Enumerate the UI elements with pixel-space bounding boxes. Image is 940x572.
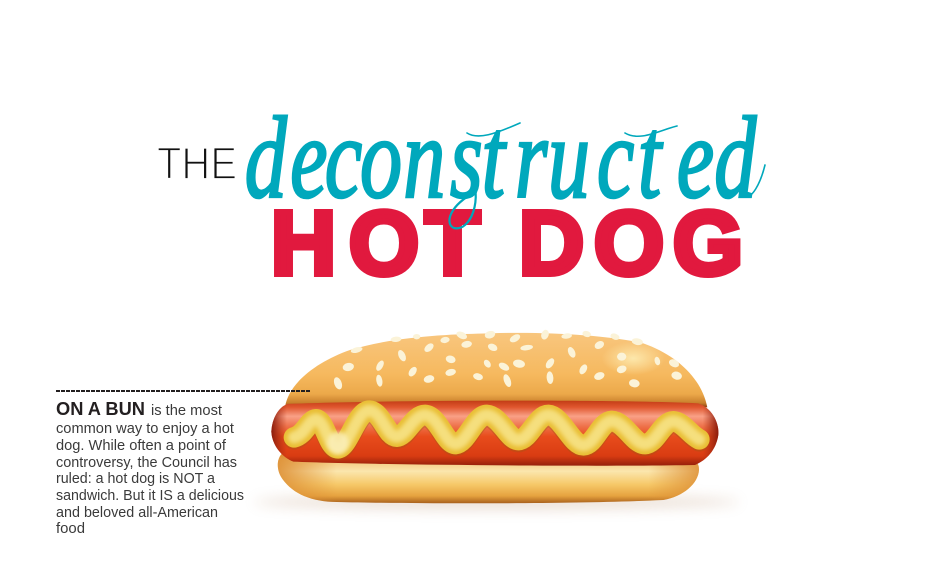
text block: on a bun: [56, 399, 244, 537]
ground shadow: [253, 495, 740, 509]
body line 8: food: [56, 520, 85, 537]
title words: HOT DOG: HOT DOG: [271, 194, 743, 294]
script flourishes: [449, 123, 765, 228]
illustration: hot dog in a bun: [253, 329, 740, 509]
body line 6: sandwich. But it IS a delicious: [56, 487, 244, 504]
title: [157, 94, 765, 294]
body line 2: common way to enjoy a hot: [56, 420, 235, 437]
body line 1: is the most: [151, 402, 223, 419]
leader line: dashed: [56, 390, 310, 392]
body line 4: controversy, the Council has: [56, 454, 237, 471]
top bun: [285, 333, 707, 407]
mustard squiggle: [294, 411, 699, 454]
title word: THE: THE: [157, 138, 237, 189]
sausage: [271, 401, 718, 466]
title word: deconstructed: deconstructed: [245, 94, 757, 223]
body line 3: dog. While often a point of: [56, 437, 227, 454]
sesame seeds: [332, 329, 683, 391]
lead-in: ON A BUN: ON A BUN: [56, 399, 145, 419]
bottom bun: [278, 454, 699, 503]
body line 5: ruled: a hot dog is NOT a: [56, 470, 216, 487]
body line 7: and beloved all-American: [56, 504, 218, 521]
